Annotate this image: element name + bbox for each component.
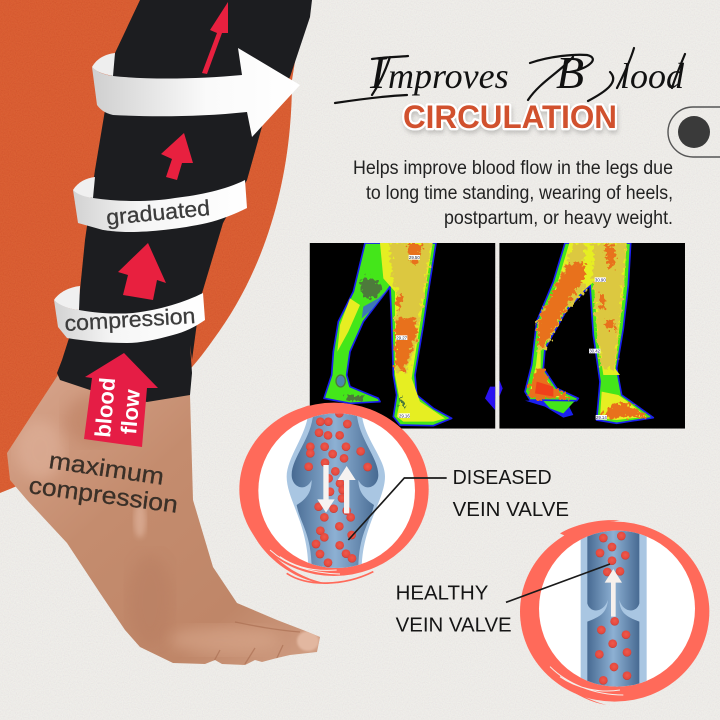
flow arrows <box>317 465 356 513</box>
description text: to long time standing, wearing of heels, <box>366 183 673 204</box>
label: diseased vein valve <box>453 467 569 521</box>
red arrow: third <box>118 243 166 300</box>
ribbon: compression <box>54 286 205 343</box>
title: Improves Blood: B <box>556 47 584 98</box>
title: Improves Blood <box>335 47 685 103</box>
orange backdrop shape <box>0 0 305 493</box>
description text: Helps improve blood flow in the legs due <box>353 158 673 179</box>
ribbon arrow: top band <box>92 48 300 137</box>
label: graduated: graduated <box>105 195 211 230</box>
description text <box>353 158 673 229</box>
blood cells <box>595 532 631 685</box>
toggle pill icon <box>668 107 720 157</box>
reading labels: 29.27 <box>396 335 408 340</box>
title: Improves Blood: lood <box>620 56 685 96</box>
reading labels: 30.42 <box>589 349 601 354</box>
label: maximum compression <box>27 447 179 519</box>
vein diagrams <box>239 403 709 705</box>
leg illustration <box>0 0 330 670</box>
leader line: diseased <box>348 478 447 540</box>
reading labels <box>589 277 607 420</box>
label: maximum compression: compression <box>27 472 179 519</box>
label: compression: compression <box>64 303 196 336</box>
label: blood: blood <box>90 376 120 438</box>
thermal images <box>310 243 685 429</box>
reading labels: 29.16 <box>399 413 410 418</box>
title: Improves Blood: mproves <box>388 56 509 96</box>
reading labels: 29.14 <box>596 415 607 420</box>
blood flow arrow <box>84 353 158 447</box>
thermal image: left <box>310 243 495 429</box>
leader line: healthy <box>506 564 610 602</box>
bare foot <box>0 370 330 670</box>
coral brush ring <box>239 403 429 584</box>
ribbon: graduated <box>73 177 247 232</box>
reading labels: 30.90 <box>595 277 606 282</box>
label: diseased vein valve: VEIN VALVE <box>453 499 569 521</box>
label: healthy vein valve: VEIN VALVE <box>396 614 512 636</box>
title: Improves Blood: I <box>369 47 388 98</box>
coral brush ring <box>520 520 709 705</box>
healthy vein valve diagram <box>520 520 709 705</box>
thermal image: right <box>499 243 685 429</box>
label: maximum compression: maximum <box>47 447 166 491</box>
heading: CIRCULATION: CIRCULATION <box>403 99 617 135</box>
diseased vein valve diagram <box>239 403 429 584</box>
label: healthy vein valve: HEALTHY <box>396 582 488 604</box>
reading labels: 29.50 <box>409 255 420 260</box>
blood cells <box>304 409 372 567</box>
red arrow: second <box>161 133 193 180</box>
black compression sleeve <box>57 0 312 402</box>
reading labels <box>396 255 420 418</box>
flow arrow <box>605 569 622 617</box>
red arrow: small top <box>202 2 228 74</box>
label: flow: flow <box>116 388 145 435</box>
label: diseased vein valve: DISEASED <box>453 467 552 489</box>
label: healthy vein valve <box>396 582 512 636</box>
description text: postpartum, or heavy weight. <box>444 208 673 229</box>
